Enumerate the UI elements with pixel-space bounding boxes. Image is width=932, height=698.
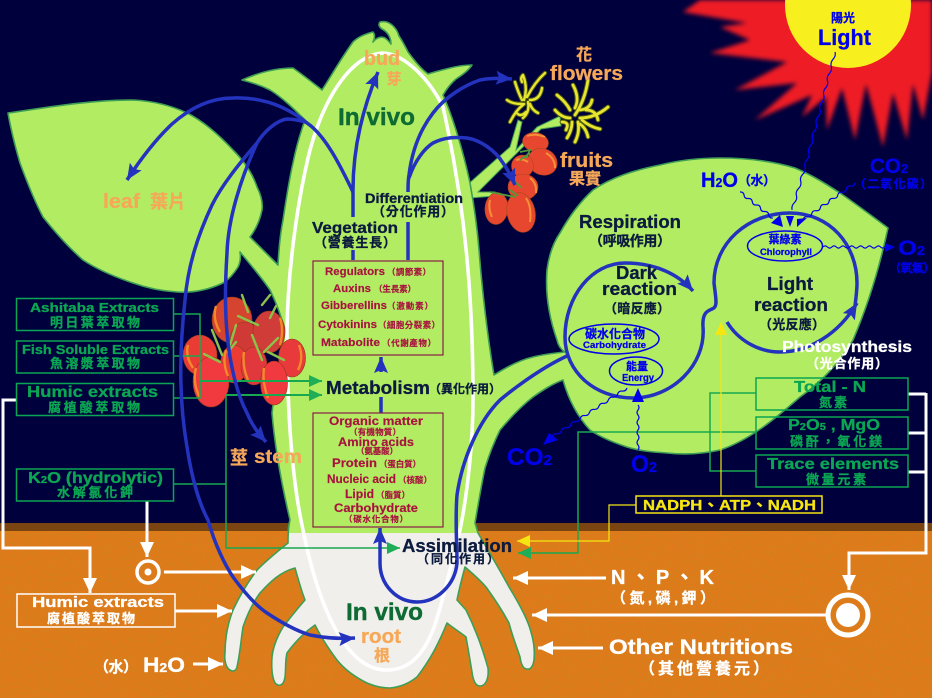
label: stem: stem [254, 447, 302, 468]
label: O2 right [889, 237, 932, 275]
label: flowers: 花 [576, 45, 592, 64]
label: vegetation [312, 220, 398, 250]
extract box: Ashitaba: 明日葉萃取物 [50, 315, 140, 330]
extract box: K2O [16, 469, 174, 501]
label: in vivo root: root [361, 626, 401, 648]
label: NPK: N、P、K [611, 567, 715, 589]
regulators box: Regulators [325, 266, 385, 278]
label: respiration: Respiration [579, 212, 681, 232]
assimilation products box: Protein [332, 458, 377, 470]
label: H2O soil: （水） [94, 659, 138, 676]
label: fruits: fruits [560, 150, 613, 172]
regulators box: （生長素） [374, 284, 416, 294]
label: differentiation: Differentiation [365, 190, 463, 206]
assimilation products box: （核酸） [398, 475, 432, 485]
extract box: Humic [16, 384, 174, 416]
label: flowers [550, 45, 623, 85]
fruit and flower stems [466, 116, 561, 198]
label: metabolism: （異化作用） [429, 381, 501, 396]
extract box: Ashitaba [16, 298, 174, 330]
energy ellipse: 能量 [626, 359, 648, 373]
assimilation products box: Carbohydrate [334, 503, 418, 515]
NADPH ATP NADH box: NADPH、ATP、NADH [643, 497, 816, 514]
label: CO2 top [854, 155, 932, 191]
label: in vivo root: 根 [374, 647, 390, 665]
label: bud [364, 48, 402, 88]
label: light reaction: （光反應） [759, 317, 825, 332]
label: bud: 芽 [386, 71, 402, 88]
label: H2O top: （水） [738, 173, 776, 188]
regulators box [313, 261, 443, 355]
extract box: Fish Soluble: Fish Soluble Extracts [22, 343, 169, 357]
chlorophyll ellipse [748, 231, 822, 261]
assimilation products box: Amino acids [338, 437, 414, 449]
extract box: K2O: 水解氯化鉀 [57, 485, 133, 500]
label: vegetation: Vegetation [312, 220, 398, 237]
flower cluster right [555, 80, 608, 142]
flower cluster left [507, 73, 545, 122]
label: assimilation: （同化作用） [417, 551, 499, 566]
nutrient source target small [137, 561, 159, 583]
regulators box: （細胞分裂素） [378, 320, 440, 330]
assimilation products box: （氨基酸） [356, 446, 398, 456]
carbohydrate ellipse: 碳水化合物 [585, 326, 645, 341]
inner white vascular ring [287, 53, 473, 670]
yellow energy connector lines [517, 322, 721, 541]
sun [683, 0, 932, 147]
white humic extracts box [17, 594, 175, 627]
label: H2O top [701, 169, 776, 192]
chlorophyll ellipse: Chlorophyll [760, 247, 812, 257]
label: leaf [103, 191, 186, 213]
label: CO2 bottom: CO2 [507, 444, 552, 471]
nutrient box: Total-N [756, 378, 908, 410]
carbohydrate ellipse: Carbohydrate [583, 340, 646, 351]
energy ellipse: Energy [622, 373, 654, 384]
extract box: Fish Soluble: 魚溶漿萃取物 [50, 356, 140, 371]
label: differentiation [365, 190, 463, 219]
label: in vivo top: In vivo [338, 104, 415, 131]
soil ground [0, 523, 932, 698]
carbohydrate ellipse [569, 324, 659, 354]
nutrient box: Trace elements [756, 455, 908, 487]
extract box: Fish Soluble [16, 341, 174, 373]
right green connector lines [518, 393, 756, 553]
label: NPK [611, 567, 715, 607]
label: CO2 top: CO2 [870, 155, 908, 178]
flowers [507, 73, 608, 142]
blue transport arrows in plant [127, 72, 567, 638]
label: respiration: （呼吸作用） [589, 233, 671, 249]
label: vegetation: （營養生長） [314, 235, 396, 250]
label: H2O soil: H2O [143, 654, 185, 677]
regulators box: Gibberellins [321, 300, 387, 312]
extract box: Humic: Humic extracts [27, 384, 158, 401]
label: other nutritions [609, 636, 793, 678]
label: H2O soil [94, 654, 185, 677]
sun label [818, 10, 872, 50]
regulators box: （調節素） [387, 267, 431, 277]
label: flowers: flowers [550, 63, 623, 85]
label: differentiation: （分化作用） [372, 204, 454, 219]
label: assimilation [402, 536, 512, 566]
regulators box: Matabolite [321, 337, 380, 349]
label: O2 right: O2 [898, 237, 925, 260]
assimilation products box: （碳水化合物） [344, 514, 408, 524]
white humic extracts box: Humic extracts [32, 594, 164, 611]
regulators box: （激動素） [387, 301, 433, 311]
label: NPK: （氮,磷,鉀） [611, 589, 715, 607]
label: other nutritions: （其他營養元） [639, 660, 769, 678]
label: light reaction: reaction [754, 295, 828, 315]
label: dark reaction: （暗反應） [604, 301, 670, 316]
tomatoes cluster left [183, 295, 306, 407]
label: dark reaction: reaction [602, 279, 677, 299]
assimilation products box: （脂質） [376, 490, 410, 500]
label: in vivo root: In vivo [346, 599, 423, 626]
label: light reaction: Light [767, 274, 813, 294]
nutrient source target large [828, 595, 868, 635]
label: assimilation: Assimilation [402, 536, 512, 556]
nutrient box: Trace elements: Trace elements [767, 456, 899, 473]
label: light reaction [754, 274, 828, 332]
label: metabolism: Metabolism [326, 378, 430, 398]
label: H2O top: H2O [701, 169, 738, 192]
fruits cluster right [484, 130, 562, 235]
label: stem [230, 447, 302, 468]
label: leaf: leaf [103, 191, 140, 213]
label: dark reaction: Dark [616, 263, 658, 283]
assimilation products box: （有機物質） [349, 427, 401, 437]
nutrient box: P2O5 MgO: 磷酐，氧化鎂 [790, 434, 882, 449]
label: stem: 莖 [230, 448, 248, 468]
sun label: Light [818, 25, 872, 50]
label: dark reaction [602, 263, 677, 316]
assimilation products box: Nucleic acid [327, 474, 396, 486]
assimilation products box [313, 413, 443, 527]
label: photosynthesis [782, 339, 912, 371]
chlorophyll ellipse: 葉綠素 [768, 232, 802, 246]
regulators box: Auxins [333, 283, 371, 295]
assimilation products box: （蛋白質） [379, 459, 421, 469]
white humic extracts box: 腐植酸萃取物 [47, 611, 135, 626]
wavy gas flow arrows [543, 52, 895, 450]
assimilation products box: Organic matter [329, 416, 424, 428]
label: photosynthesis: （光合作用） [806, 356, 888, 371]
label: fruits: 果實 [569, 169, 601, 188]
left green connector lines [174, 314, 400, 548]
extract box: K2O: K2O (hydrolytic) [28, 470, 163, 487]
extract box: Humic: 腐植酸萃取物 [48, 400, 140, 415]
regulators box: （代謝產物） [382, 338, 436, 348]
label: other nutritions: Other Nutritions [609, 636, 793, 659]
label: CO2 top: （二氧化碳） [854, 176, 932, 191]
nutrient box: Total-N: 氮素 [819, 395, 847, 410]
regulators box: Cytokinins [318, 319, 377, 331]
label: photosynthesis: Photosynthesis [782, 339, 912, 356]
label: respiration [579, 212, 681, 249]
nutrient box: Trace elements: 微量元素 [806, 472, 866, 487]
nutrient box: P2O5 MgO: P2O5 , MgO [788, 417, 880, 434]
extract box: Ashitaba: Ashitaba Extracts [30, 300, 159, 315]
label: metabolism [326, 378, 501, 398]
label: leaf: 葉片 [150, 192, 186, 212]
white nutrient connector lines [3, 393, 926, 664]
sun label: 陽光 [831, 10, 855, 25]
nutrient box: P2O5 MgO [756, 417, 908, 449]
blue reaction cycle arrows in right leaf [565, 213, 857, 398]
label: fruits [560, 150, 613, 188]
label: bud: bud [364, 48, 400, 70]
label: in vivo root [346, 599, 423, 665]
energy ellipse [610, 357, 662, 385]
assimilation products box: Lipid [345, 489, 374, 501]
nutrient box: Total-N: Total - N [794, 379, 866, 396]
label: O2 bottom: O2 [631, 451, 657, 478]
